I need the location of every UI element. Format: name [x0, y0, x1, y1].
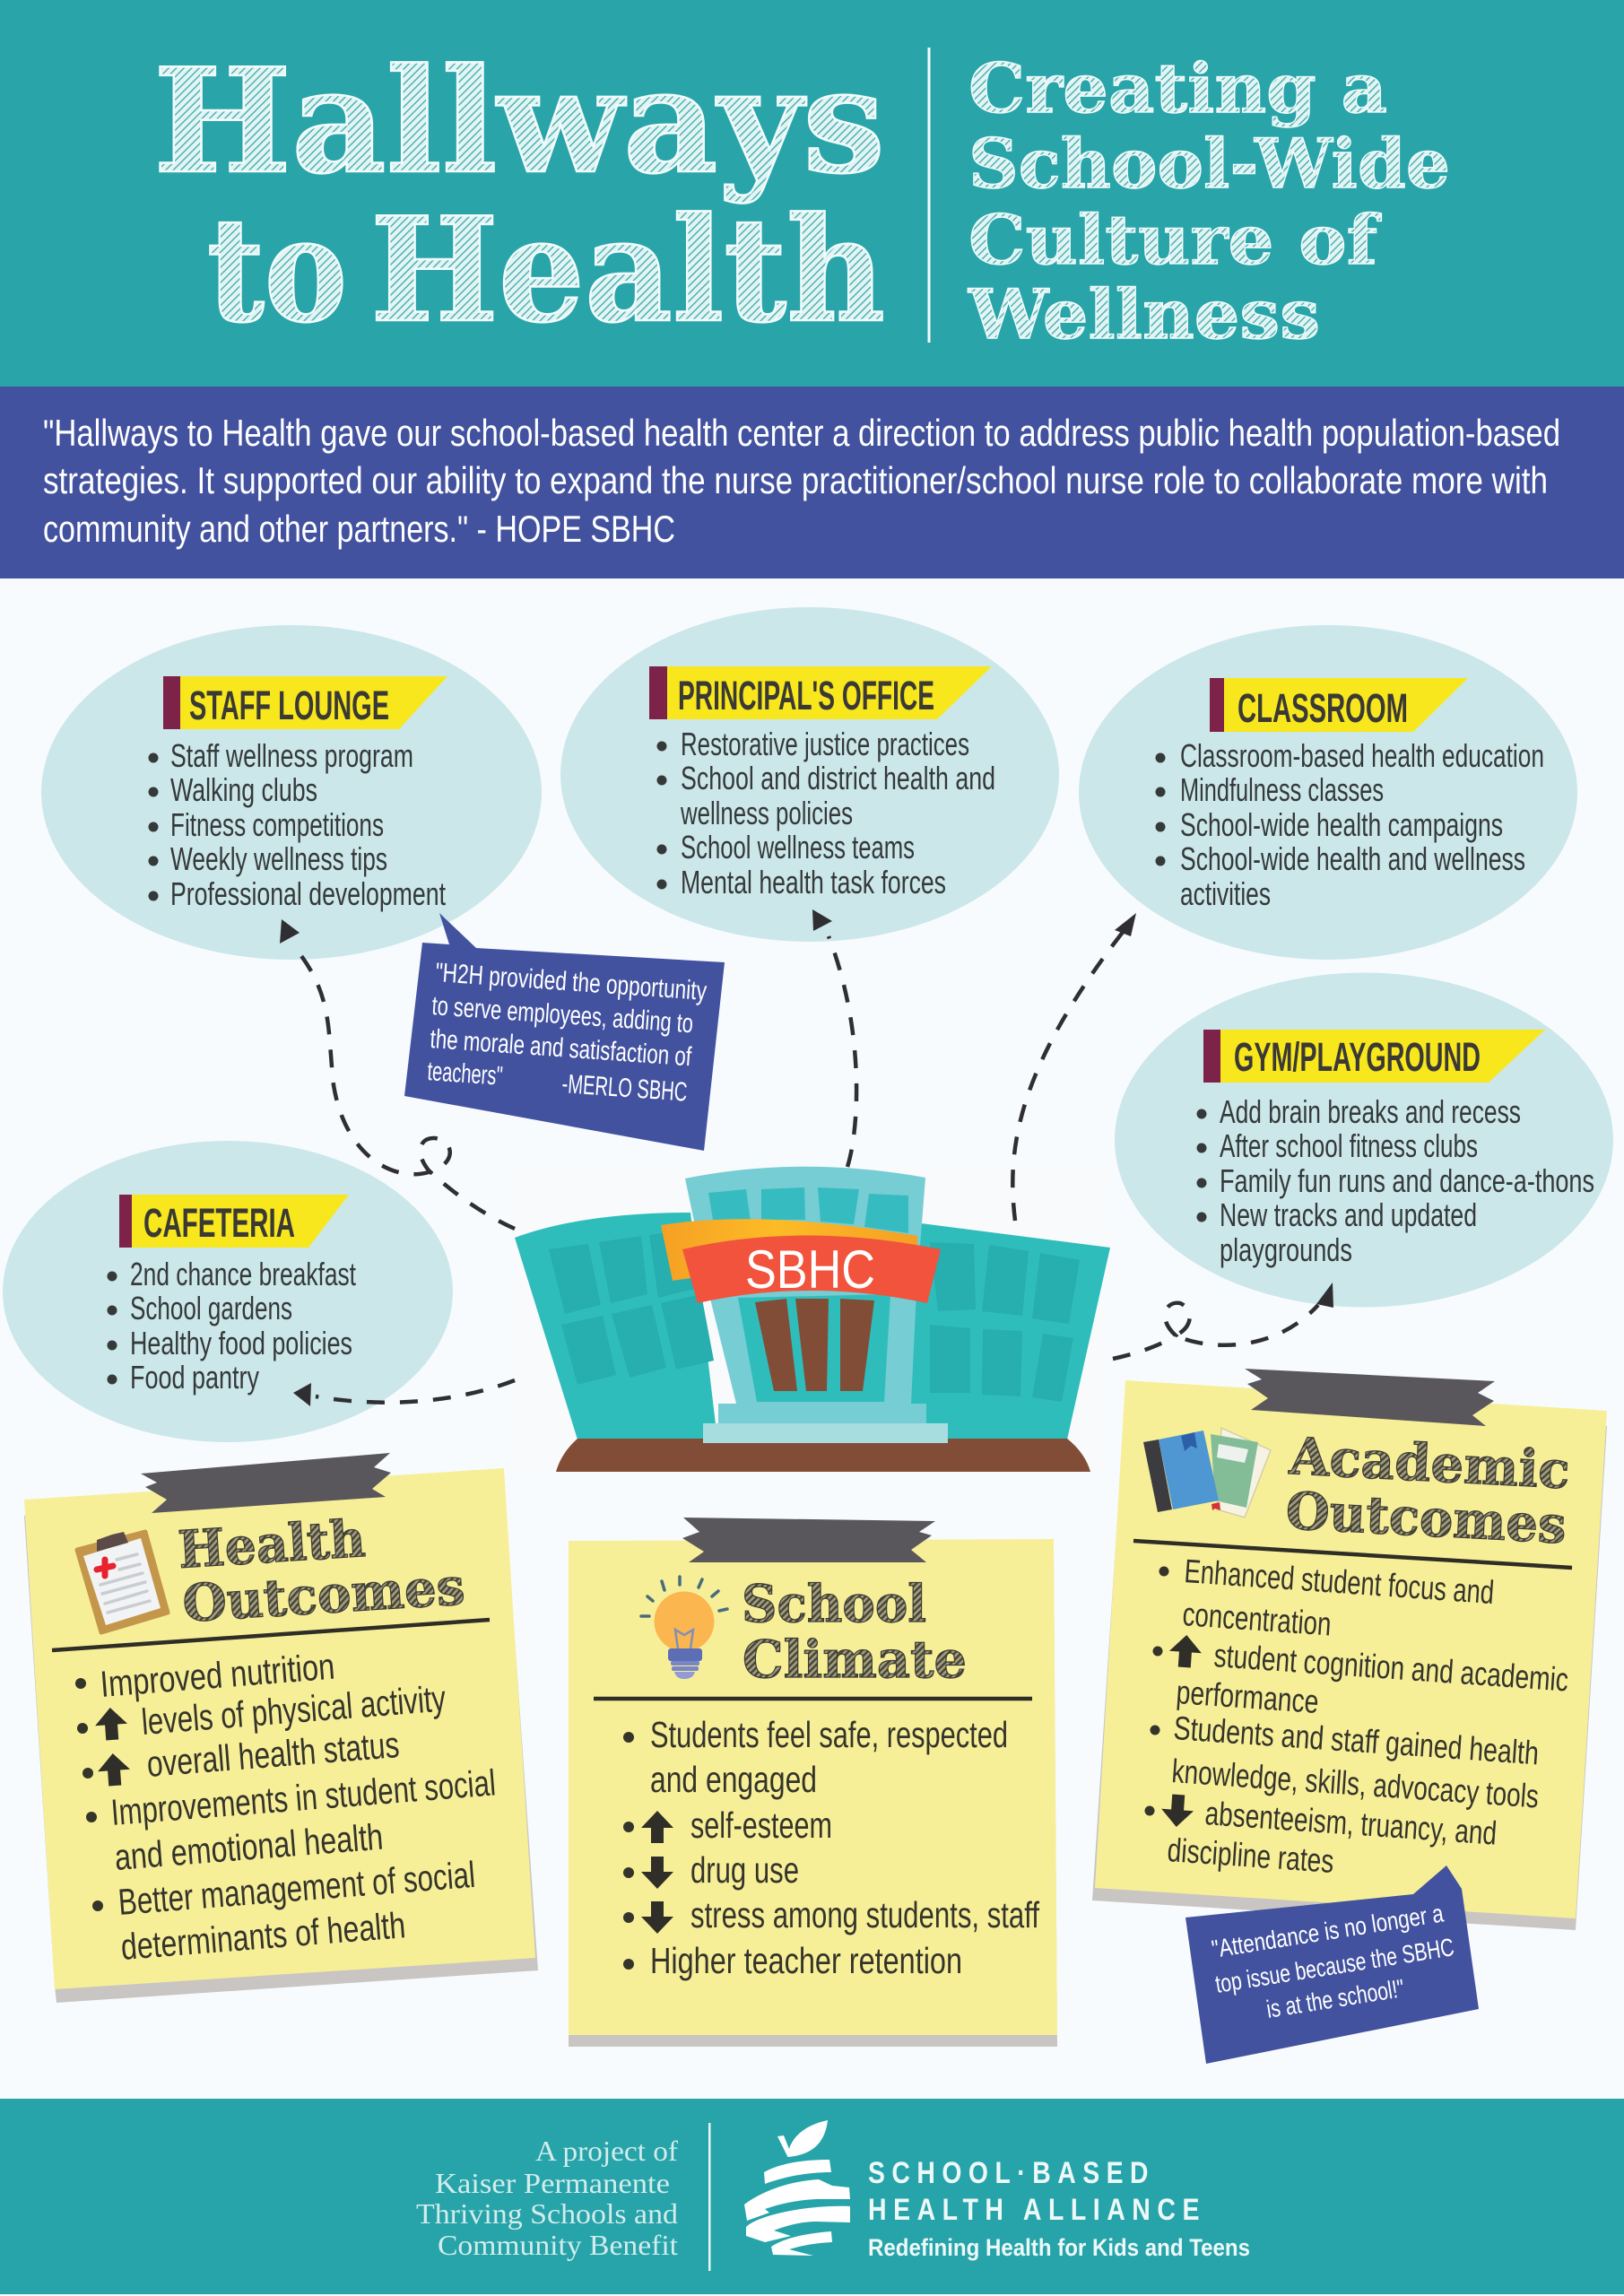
arrow: to classroom [1012, 913, 1136, 1221]
heading: school climate: School [742, 1574, 926, 1634]
label: staff lounge: STAFF LOUNGE [189, 683, 389, 728]
list: gym/playground: After school fitness clubs [1220, 1127, 1478, 1164]
list: health outcomes: levels of physical activity [140, 1677, 447, 1743]
list: principal's office: Mental health task forces [681, 864, 946, 900]
label: principal's office: PRINCIPAL'S OFFICE [678, 673, 934, 718]
footer credit text: Community Benefit [438, 2229, 678, 2261]
callout: attendance quote: top issue because the SBHC [1213, 1933, 1456, 1998]
logo wordmark: Redefining Health for Kids and Teens [868, 2234, 1250, 2261]
red banner [682, 1236, 941, 1303]
footer credit text: A project of [535, 2135, 678, 2167]
tape [682, 1518, 935, 1562]
callout: Merlo quote: to serve employees, adding to [431, 991, 694, 1039]
quote band: community and other partners." - HOPE SBHC [43, 508, 675, 550]
logo wordmark [868, 2156, 1250, 2261]
callout: Merlo quote [404, 913, 725, 1151]
icon: books [1143, 1428, 1271, 1518]
title [153, 37, 885, 354]
list: school climate: Students feel safe, respected [650, 1714, 1008, 1755]
title: Health [370, 186, 885, 354]
centre tower [685, 1167, 925, 1404]
subtitle: Creating a [968, 48, 1387, 128]
bubble: classroom [1079, 625, 1577, 960]
heading: academic outcomes: Academic [1287, 1426, 1571, 1500]
label: gym/playground: GYM/PLAYGROUND [1234, 1034, 1481, 1080]
list: gym/playground [1196, 1093, 1594, 1268]
list: academic outcomes: performance [1175, 1674, 1320, 1720]
note: health outcomes [24, 1453, 538, 2003]
tape [1245, 1369, 1495, 1426]
subtitle: School-Wide [968, 124, 1450, 204]
list: classroom: activities [1180, 875, 1271, 912]
list: gym/playground: Add brain breaks and recess [1220, 1093, 1521, 1130]
arrow: to gym [1113, 1283, 1333, 1359]
bubble: staff lounge [41, 625, 542, 960]
building: SBHC [515, 1167, 1111, 1473]
list: academic outcomes [1144, 1552, 1569, 1880]
icon: apple logo [744, 2120, 850, 2256]
callout: Merlo quote: "H2H provided the opportunity [435, 958, 708, 1006]
callout: Merlo quote: the morale and satisfaction of [430, 1024, 693, 1072]
callout: attendance quote: "Attendance is no longer a [1210, 1899, 1446, 1963]
list: health outcomes [75, 1646, 497, 1968]
tape [141, 1453, 391, 1513]
list: staff lounge: Weekly wellness tips [170, 840, 387, 877]
callout: attendance quote: is at the school!" [1264, 1974, 1406, 2023]
heading: health outcomes: Health [177, 1509, 367, 1580]
list: school climate: self-esteem [690, 1805, 832, 1846]
label: gym/playground [1203, 1030, 1545, 1083]
subtitle [968, 48, 1450, 354]
list: school climate [623, 1714, 1039, 1981]
list: health outcomes: Better management of social [117, 1854, 476, 1923]
callout: Merlo quote: teachers" [427, 1057, 504, 1091]
list: health outcomes: determinants of health [119, 1904, 407, 1968]
subtitle: Culture of [968, 200, 1382, 280]
list: cafeteria: 2nd chance breakfast [130, 1256, 356, 1292]
list: principal's office [656, 726, 995, 900]
footer credit text: Kaiser Permanente [435, 2167, 670, 2199]
list: academic outcomes: concentration [1181, 1596, 1333, 1643]
callout: Merlo quote: -MERLO SBHC [561, 1069, 688, 1108]
list: staff lounge: Professional development [170, 875, 446, 912]
list: cafeteria [108, 1256, 356, 1396]
bubble: cafeteria [3, 1141, 453, 1442]
arrow: to staff lounge [280, 919, 515, 1229]
list: school climate: and engaged [650, 1759, 817, 1800]
list: cafeteria: School gardens [130, 1290, 292, 1326]
list: staff lounge: Staff wellness program [170, 737, 413, 774]
list: staff lounge [149, 737, 446, 912]
list: school climate: stress among students, staff [690, 1894, 1039, 1935]
label: classroom: CLASSROOM [1238, 685, 1408, 731]
list: classroom: Mindfulness classes [1180, 771, 1384, 808]
bubble: principal's office [560, 607, 1059, 942]
list: cafeteria: Food pantry [130, 1359, 259, 1396]
list: principal's office: School and district health and [681, 760, 995, 796]
logo wordmark: HEALTH ALLIANCE [868, 2193, 1206, 2227]
base [556, 1439, 1090, 1472]
icon: clipboard [77, 1532, 168, 1632]
bubble: gym/playground [1115, 972, 1613, 1308]
footer credit text [416, 2135, 678, 2261]
list: academic outcomes: absenteeism, truancy, and [1203, 1795, 1498, 1852]
title: to [207, 186, 347, 354]
label: staff lounge [163, 676, 447, 729]
callout: attendance quote [1185, 1866, 1479, 2064]
label: principal's office [649, 666, 992, 719]
list: cafeteria: Healthy food policies [130, 1325, 352, 1361]
heading: school climate [742, 1574, 967, 1690]
note: school climate [569, 1518, 1057, 2047]
list: health outcomes: Improvements in student social [109, 1761, 497, 1833]
list: gym/playground: playgrounds [1220, 1231, 1352, 1268]
note: academic outcomes [1092, 1369, 1607, 1930]
list: principal's office: Restorative justice practices [681, 726, 969, 762]
list: principal's office: School wellness teams [681, 829, 915, 865]
list: classroom [1155, 737, 1544, 912]
heading: school climate: Climate [743, 1630, 967, 1690]
door panel [738, 1294, 890, 1402]
right wing [897, 1223, 1110, 1439]
list: school climate: Higher teacher retention [650, 1940, 962, 1981]
list: health outcomes: and emotional health [113, 1816, 385, 1878]
arrow: to cafeteria [293, 1380, 515, 1406]
list: classroom: School-wide health campaigns [1180, 806, 1503, 843]
subtitle: Wellness [968, 274, 1320, 354]
list: academic outcomes: discipline rates [1166, 1831, 1335, 1880]
label: classroom [1210, 678, 1468, 732]
red banner: SBHC [745, 1239, 875, 1300]
label: cafeteria: CAFETERIA [143, 1200, 295, 1246]
orange banner [661, 1219, 917, 1281]
heading: health outcomes: Outcomes [181, 1556, 466, 1634]
list: staff lounge: Fitness competitions [170, 806, 384, 843]
heading: academic outcomes: Outcomes [1284, 1481, 1568, 1555]
heading: academic outcomes [1284, 1426, 1571, 1555]
logo wordmark: SCHOOL·BASED [868, 2156, 1155, 2190]
heading: health outcomes [177, 1509, 466, 1634]
list: principal's office: wellness policies [680, 795, 853, 831]
footer credit text: Thriving Schools and [416, 2197, 678, 2230]
list: health outcomes: Improved nutrition [99, 1646, 336, 1705]
footer band [0, 2099, 1624, 2294]
quote band [0, 387, 1624, 578]
left wing [515, 1213, 717, 1439]
list: gym/playground: New tracks and updated [1220, 1196, 1477, 1233]
list: school climate: drug use [690, 1849, 799, 1891]
arrow: to principal's office [812, 909, 856, 1167]
header band [0, 0, 1624, 387]
icon: light bulb [641, 1577, 727, 1679]
title: Hallways [153, 37, 885, 205]
list: health outcomes: overall health status [145, 1724, 401, 1785]
list: academic outcomes: Enhanced student focus and [1183, 1552, 1495, 1611]
list: staff lounge: Walking clubs [170, 771, 317, 808]
